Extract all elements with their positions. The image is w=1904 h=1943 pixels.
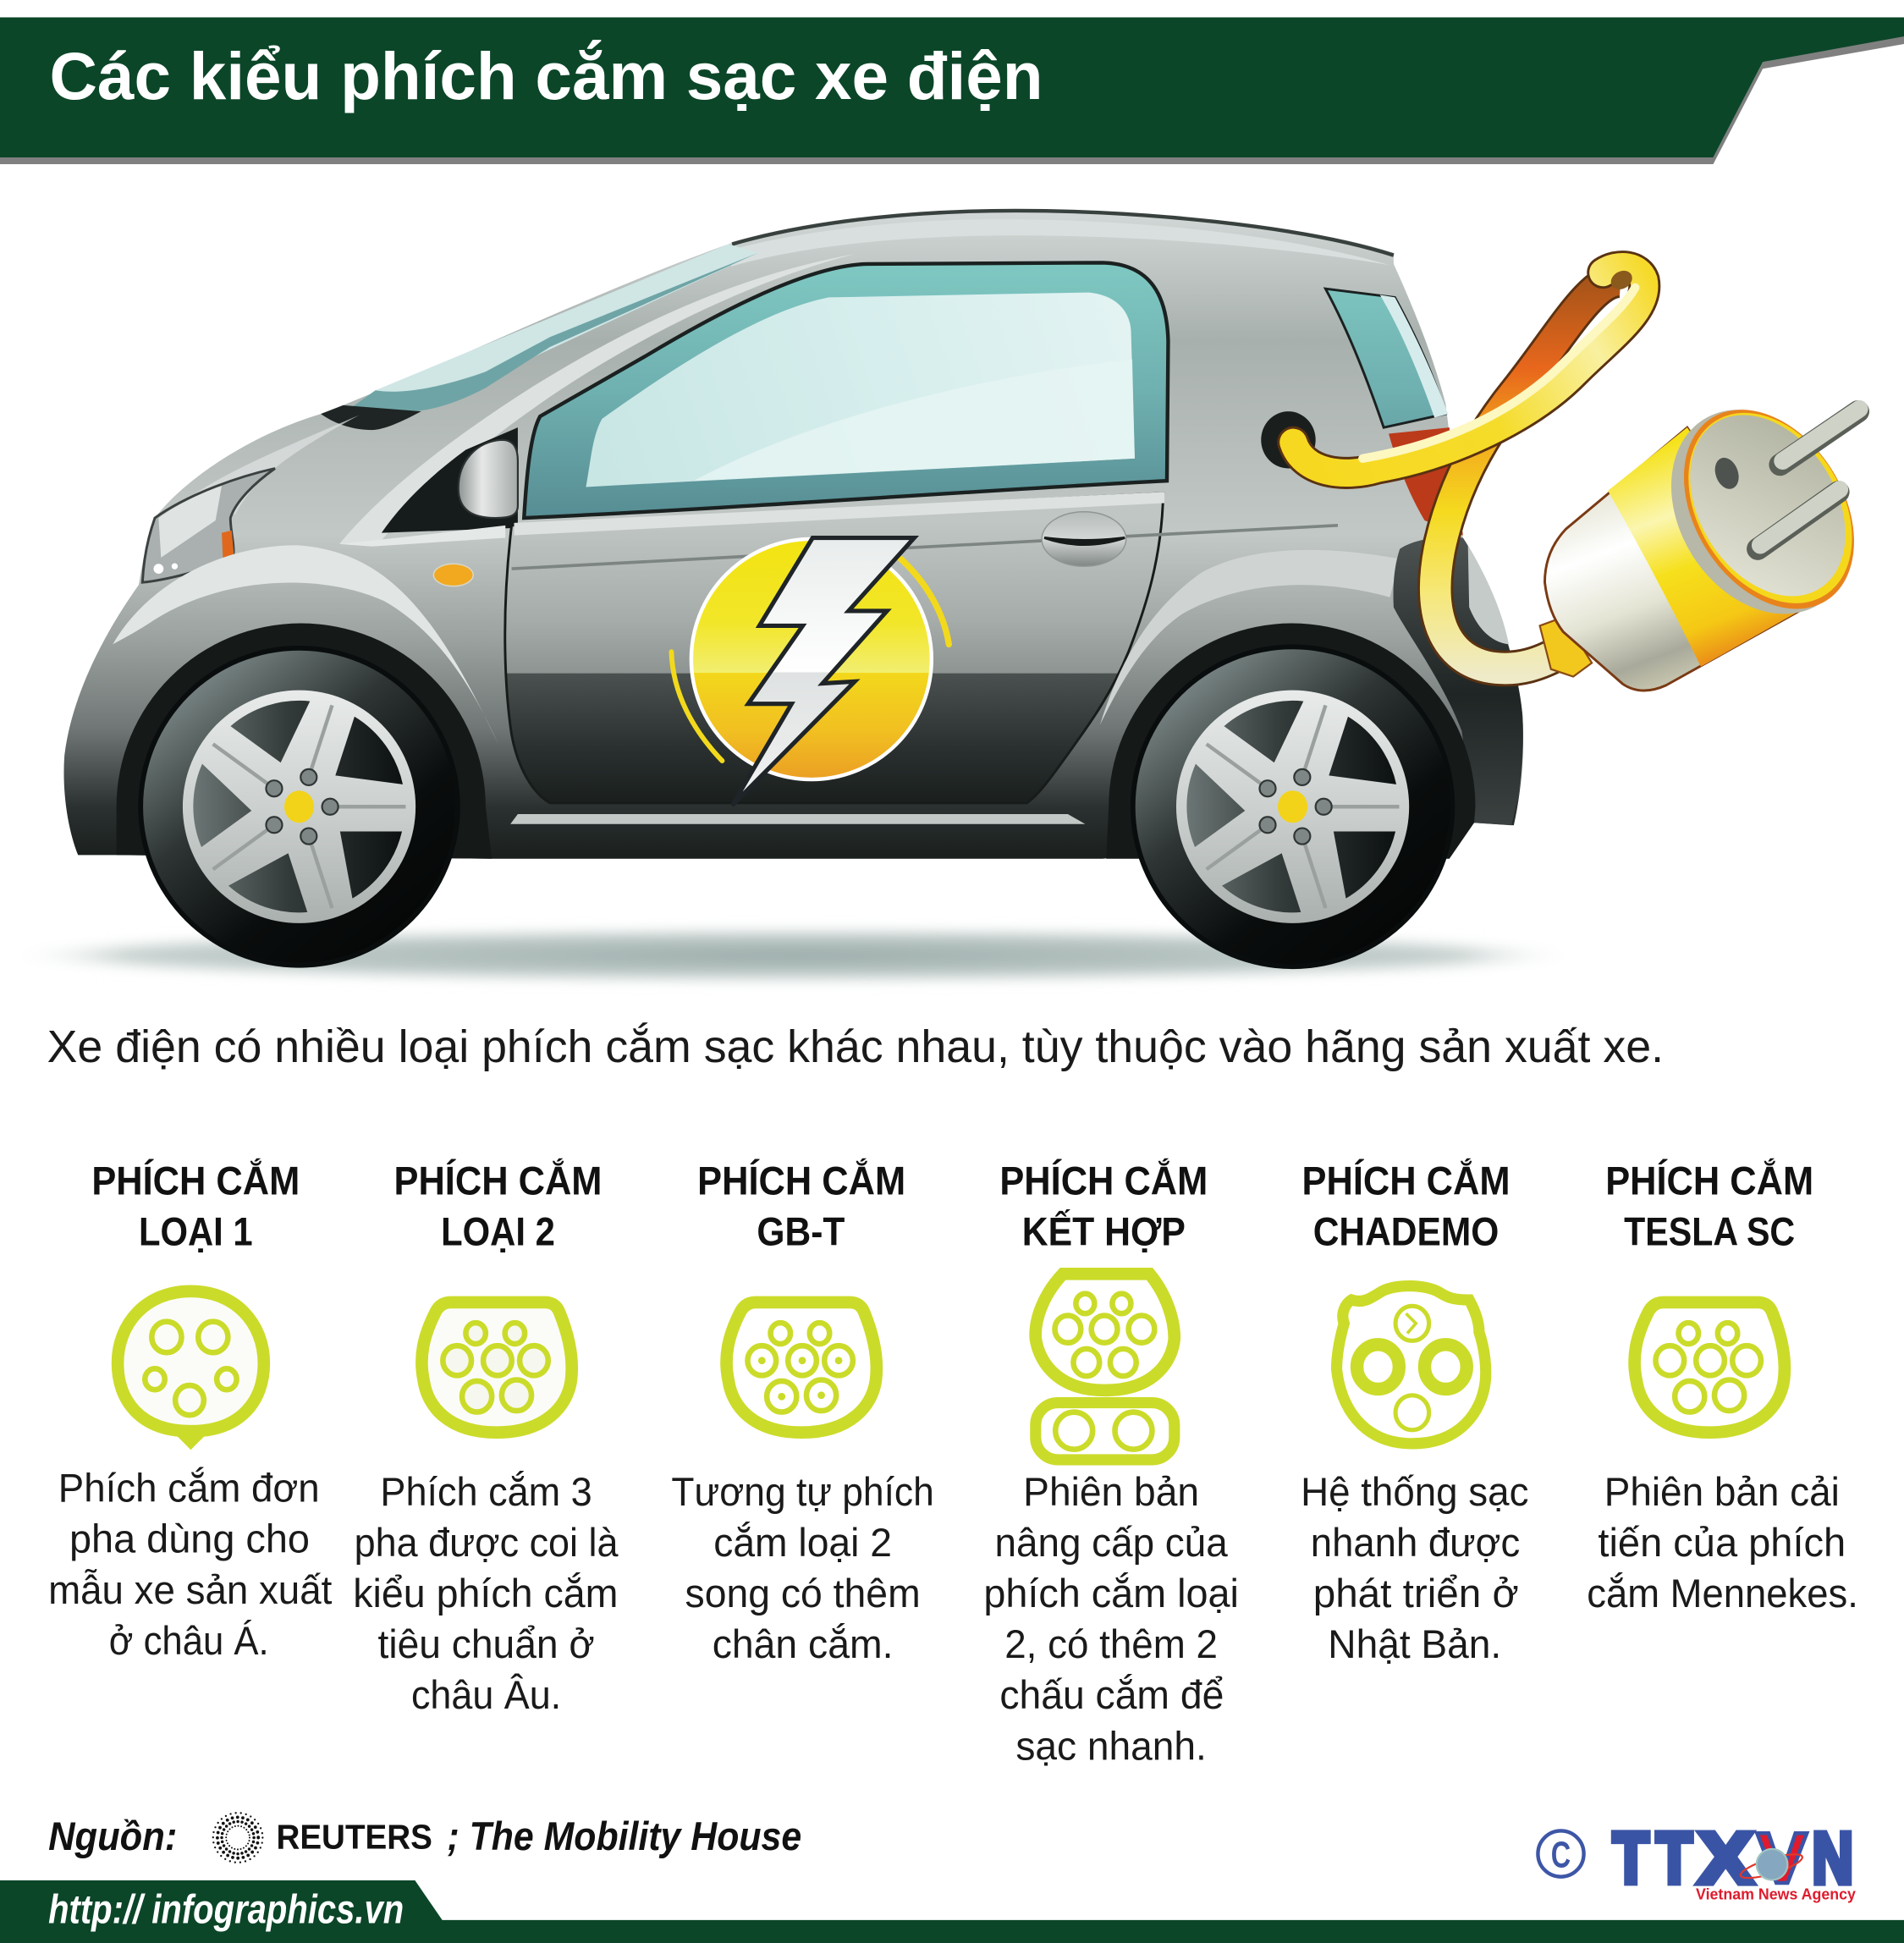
- charging cable: [1293, 267, 1644, 669]
- heading: PHÍCH CẮM: [394, 1159, 602, 1203]
- roof edge: [732, 211, 1394, 256]
- description: [1587, 1470, 1858, 1615]
- heading: [697, 1159, 905, 1254]
- description: [48, 1467, 332, 1663]
- icon: Tesla plug: [1635, 1302, 1785, 1433]
- description: Nhật Bản.: [1328, 1622, 1501, 1666]
- description: Phích cắm đơn: [58, 1467, 320, 1511]
- heading: [999, 1159, 1208, 1254]
- description: [983, 1470, 1239, 1768]
- icon: CHAdeMO plug: [1337, 1286, 1486, 1444]
- charging port: [1261, 411, 1316, 469]
- description: Phiên bản cải: [1604, 1470, 1840, 1514]
- icon: copyright: C: [1551, 1835, 1571, 1876]
- source line: Nguồn:: [48, 1814, 177, 1858]
- description: Tương tự phích: [671, 1470, 934, 1514]
- heading: CHADEMO: [1313, 1210, 1499, 1254]
- heading: [1605, 1159, 1813, 1254]
- footer bar: [0, 1880, 1904, 1943]
- logo: TTXVN: X: [1698, 1818, 1753, 1898]
- rear wheel arch: [1106, 624, 1475, 859]
- plug: [1540, 376, 1889, 691]
- heading: TESLA SC: [1624, 1210, 1795, 1254]
- source line: REUTERS: [276, 1818, 432, 1857]
- icon: type 1 plug: [118, 1291, 264, 1450]
- A-pillar highlight: [339, 254, 855, 544]
- heading: PHÍCH CẮM: [91, 1159, 300, 1203]
- belt line highlight: [515, 492, 1164, 536]
- side window: [524, 262, 1168, 518]
- icon: copyright: [1538, 1830, 1584, 1877]
- turn marker: [433, 564, 473, 586]
- column: GB-T: [671, 1159, 934, 1666]
- description: phát triển ở: [1313, 1571, 1519, 1615]
- heading: PHÍCH CẮM: [999, 1159, 1208, 1203]
- rear wheel: [1131, 644, 1455, 969]
- logo: TTXVN: V: [1757, 1818, 1808, 1898]
- description: kiểu phích cắm: [353, 1571, 618, 1615]
- front wheel arch: [117, 624, 492, 859]
- headlight: [142, 469, 275, 582]
- heading: [394, 1159, 602, 1254]
- description: chấu cắm để: [999, 1673, 1224, 1717]
- heading: LOẠI 2: [441, 1210, 555, 1254]
- column: CHAdeMO: [1301, 1159, 1528, 1666]
- description: pha được coi là: [355, 1521, 619, 1565]
- description: nhanh được: [1311, 1521, 1520, 1565]
- icon: Reuters logo: [213, 1813, 262, 1863]
- title banner: [0, 17, 1904, 164]
- heading: PHÍCH CẮM: [697, 1159, 905, 1203]
- icon: GB-T plug: [726, 1302, 877, 1433]
- description: [1301, 1470, 1528, 1666]
- lightning badge: [671, 538, 949, 806]
- description: cắm loại 2: [713, 1521, 892, 1565]
- description: pha dùng cho: [69, 1517, 310, 1561]
- column: kết hợp: [983, 1159, 1239, 1768]
- loop opening: [1608, 267, 1636, 293]
- description: Phiên bản: [1023, 1470, 1199, 1514]
- car body: [63, 211, 1523, 859]
- description: mẫu xe sản xuất: [48, 1568, 332, 1612]
- front hood shade: [161, 416, 360, 518]
- heading: GB-T: [757, 1210, 845, 1254]
- sill highlight: [510, 814, 1085, 824]
- description: nâng cấp của: [995, 1521, 1229, 1565]
- title: Các kiểu phích cắm sạc xe điện: [50, 38, 1043, 113]
- icon: globe: [1738, 1849, 1804, 1883]
- roof highlight: [731, 219, 1389, 267]
- heading: [91, 1159, 300, 1254]
- description: tiến của phích: [1598, 1521, 1846, 1565]
- ground shadow: [0, 929, 1586, 982]
- logo: TTXVN: T: [1656, 1818, 1692, 1898]
- rear window: [1325, 289, 1448, 427]
- logo: TTXVN: Vietnam News Agency: [1696, 1885, 1857, 1903]
- logo: TTXVN: N: [1813, 1818, 1853, 1898]
- column: loại 1: [48, 1159, 332, 1663]
- logo: TTXVN: T: [1613, 1818, 1648, 1898]
- heading: PHÍCH CẮM: [1605, 1159, 1813, 1203]
- description: ở châu Á.: [109, 1619, 269, 1663]
- icon: combo plug: [1036, 1274, 1175, 1460]
- logo: TTXVN: [1538, 1818, 1857, 1903]
- description: cắm Mennekes.: [1587, 1571, 1858, 1615]
- description: chân cắm.: [713, 1622, 893, 1666]
- car illustration: [0, 211, 1889, 982]
- description: [353, 1470, 619, 1717]
- website: http:// infographics.vn: [48, 1887, 404, 1933]
- rear bumper dark panel: [1394, 537, 1523, 825]
- heading: KẾT HỢP: [1022, 1210, 1186, 1254]
- icon: type 2 plug: [421, 1302, 572, 1433]
- body crease: [512, 526, 1338, 569]
- heading: [1302, 1159, 1510, 1254]
- description: tiêu chuẩn ở: [377, 1622, 595, 1666]
- plug pins: [1780, 411, 1858, 465]
- column: loại 2: [353, 1159, 619, 1717]
- description: Phích cắm 3: [380, 1470, 592, 1514]
- description: [671, 1470, 934, 1666]
- source line: ; The Mobility House: [447, 1814, 801, 1858]
- windshield: [321, 244, 758, 430]
- description: châu Âu.: [411, 1673, 561, 1717]
- rear fender highlight: [1100, 550, 1400, 725]
- door handle: [1042, 512, 1126, 566]
- description: song có thêm: [685, 1571, 921, 1615]
- description: phích cắm loại: [983, 1571, 1239, 1615]
- door panel: [505, 493, 1164, 803]
- heading: PHÍCH CẮM: [1302, 1159, 1510, 1203]
- side mirror: [459, 440, 518, 518]
- rear light: [1389, 427, 1463, 536]
- fender highlight: [113, 545, 498, 744]
- intro text: Xe điện có nhiều loại phích cắm sạc khác nhau, tùy thuộc vào hãng sản xuất xe.: [47, 1021, 1664, 1072]
- mirror base: [382, 427, 518, 533]
- column: Tesla SC: [1587, 1159, 1858, 1615]
- front wheel: [138, 646, 460, 968]
- source line: [48, 1813, 801, 1863]
- heading: LOẠI 1: [139, 1210, 253, 1254]
- description: sạc nhanh.: [1015, 1724, 1207, 1768]
- description: Hệ thống sạc: [1301, 1470, 1528, 1514]
- description: 2, có thêm 2: [1004, 1622, 1218, 1666]
